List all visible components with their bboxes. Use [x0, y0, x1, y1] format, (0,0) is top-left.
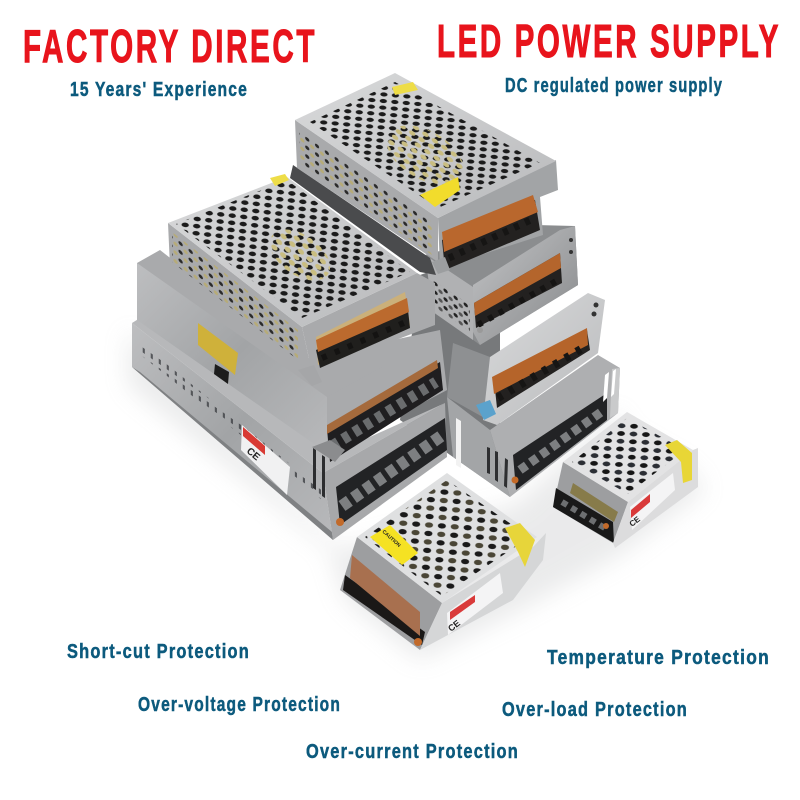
white label [628, 473, 675, 530]
side sticker [665, 440, 692, 483]
caution sticker [370, 525, 418, 565]
top sticker [392, 82, 418, 95]
side sticker [505, 523, 535, 567]
unit: middle left large case [137, 250, 447, 462]
dark lower edge [290, 165, 436, 275]
left face with holes [295, 120, 438, 262]
unit: front left perforated case [168, 174, 435, 386]
left face with holes [168, 223, 312, 372]
unit: bottom right solid case [447, 355, 620, 497]
subtitle: experience: 15 Years' Experience [70, 79, 248, 101]
title: factory direct: FACTORY DIRECT [23, 20, 317, 72]
unit: middle right solid case [447, 293, 605, 425]
white rating label: CE [244, 446, 262, 463]
protection label: over-current: Over-current Protection [306, 741, 519, 763]
white rating label [241, 425, 290, 495]
white label [446, 573, 503, 635]
right face with terminal [438, 160, 558, 268]
caution sticker [420, 177, 460, 207]
protection label: over-voltage: Over-voltage Protection [138, 694, 341, 716]
perforated top [168, 177, 417, 327]
product group: power supply units [132, 73, 698, 650]
protection label: over-load: Over-load Protection [502, 699, 688, 721]
protection label: temperature: Temperature Protection [547, 647, 770, 669]
unit: small right case [553, 412, 698, 548]
unit: top perforated case [290, 73, 558, 275]
black connector slot [214, 364, 229, 384]
top sticker [270, 174, 289, 186]
white label: CE [446, 618, 462, 634]
unit: small front center case [340, 473, 546, 650]
right face with terminal [302, 273, 435, 372]
soft drop shadow [128, 330, 705, 660]
white label: CE [628, 514, 643, 529]
unit: bottom left large case [132, 318, 447, 540]
caution sticker: CAUTION [381, 529, 402, 549]
yellow warning sticker [198, 323, 238, 375]
perforated top [295, 73, 556, 218]
protection label: short-cut: Short-cut Protection [67, 641, 250, 663]
backing: gaps between stacks [400, 268, 510, 497]
unit: upper right perforated case [425, 225, 578, 345]
subtitle: dc regulated: DC regulated power supply [505, 75, 723, 97]
